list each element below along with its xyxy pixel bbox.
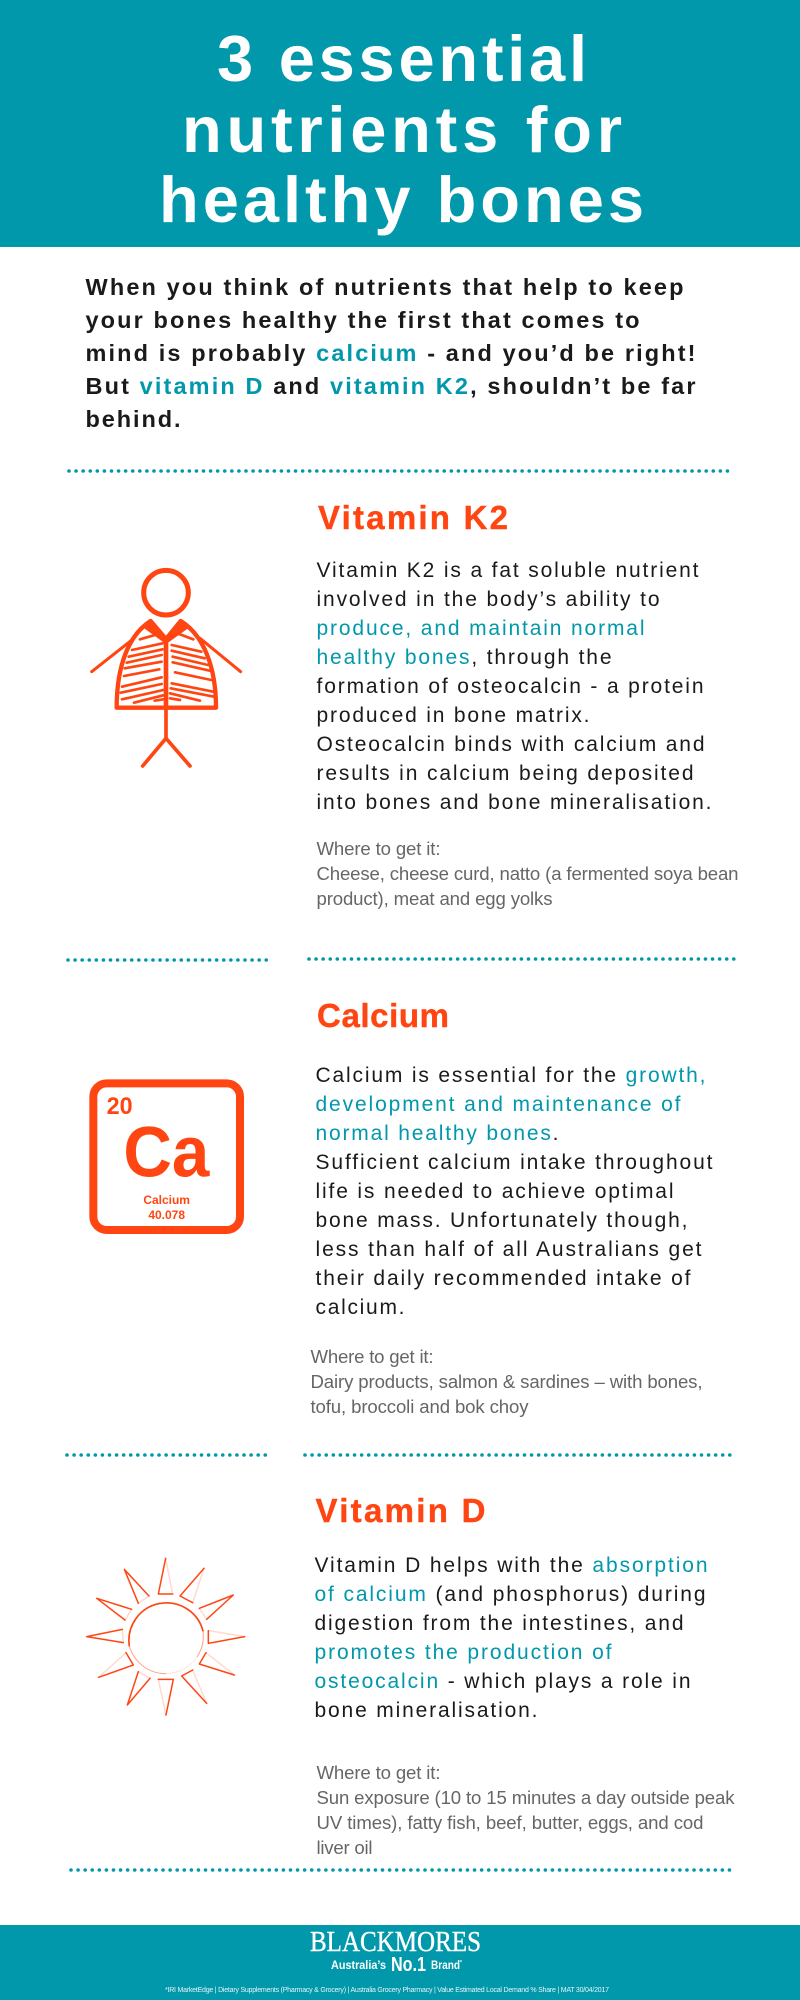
body text: less than half of all Australians get: [316, 1238, 702, 1261]
where to get it: Where to get it:: [316, 838, 440, 859]
icon: periodic table calcium tile: [93, 1083, 240, 1230]
body text: into bones and bone mineralisation.: [316, 791, 712, 814]
body text: development and maintenance of: [316, 1093, 681, 1116]
intro text: But vitamin D and vitamin K2, shouldn’t be far: [86, 373, 696, 399]
where to get it: UV times), fatty fish, beef, butter, eggs, and cod: [316, 1812, 704, 1833]
body text: bone mineralisation.: [314, 1699, 538, 1722]
title: healthy bones: [159, 163, 644, 236]
where to get it: Dairy products, salmon & sardines – with bones,: [310, 1371, 702, 1392]
title: nutrients for: [182, 93, 622, 166]
panel: vitamin K2: [92, 499, 738, 909]
panel: calcium: [93, 997, 713, 1417]
where to get it: [310, 1346, 702, 1417]
intro text: [86, 274, 696, 432]
brand tagline: Brand: [431, 1960, 460, 1972]
body text: [314, 1554, 708, 1722]
body text: promotes the production of: [314, 1641, 612, 1664]
heading: Vitamin D: [316, 1492, 486, 1529]
heading: Vitamin K2: [318, 499, 508, 536]
icon: periodic table calcium tile: 40.078: [148, 1208, 185, 1222]
body text: healthy bones, through the: [316, 646, 612, 669]
body text: life is needed to achieve optimal: [316, 1180, 674, 1203]
brand tagline: *: [460, 1960, 462, 1966]
icon: sun outline: [87, 1558, 245, 1715]
brand tagline: [331, 1954, 462, 1976]
body text: Calcium is essential for the growth,: [316, 1064, 706, 1087]
where to get it: Where to get it:: [316, 1762, 440, 1783]
body text: osteocalcin - which plays a role in: [314, 1670, 690, 1693]
brand tagline: Australia’s: [331, 1960, 386, 1972]
body text: calcium.: [316, 1296, 404, 1319]
body text: [316, 559, 712, 814]
body text: Vitamin K2 is a fat soluble nutrient: [316, 559, 699, 582]
where to get it: [316, 1762, 735, 1858]
body text: involved in the body’s ability to: [316, 588, 660, 611]
title: [159, 22, 644, 236]
body text: formation of osteocalcin - a protein: [316, 675, 704, 698]
body text: normal healthy bones.: [316, 1122, 558, 1145]
body text: Vitamin D helps with the absorption: [314, 1554, 708, 1577]
where to get it: product), meat and egg yolks: [316, 888, 552, 909]
icon: periodic table calcium tile: Ca: [123, 1112, 211, 1192]
icon: stick figure with ribcage: [92, 570, 241, 766]
intro text: When you think of nutrients that help to keep: [86, 274, 684, 300]
intro text: behind.: [86, 406, 180, 432]
title: 3 essential: [217, 22, 587, 95]
body text: Osteocalcin binds with calcium and: [316, 733, 704, 756]
body text: bone mass. Unfortunately though,: [316, 1209, 688, 1232]
icon: periodic table calcium tile: Calcium: [143, 1193, 190, 1207]
brand logo: BLACKMORES: [310, 1927, 481, 1958]
body text: Sufficient calcium intake throughout: [316, 1151, 713, 1174]
body text: produce, and maintain normal: [316, 617, 644, 640]
intro text: mind is probably calcium - and you’d be right!: [86, 340, 696, 366]
body text: results in calcium being deposited: [316, 762, 694, 785]
where to get it: Where to get it:: [310, 1346, 434, 1367]
footer banner: [0, 1925, 800, 2000]
body text: [316, 1064, 713, 1319]
body text: of calcium (and phosphorus) during: [314, 1583, 706, 1606]
icon: periodic table calcium tile: 20: [107, 1093, 133, 1120]
body text: digestion from the intestines, and: [314, 1612, 684, 1635]
where to get it: tofu, broccoli and bok choy: [310, 1396, 529, 1417]
where to get it: [316, 838, 738, 909]
brand tagline: No.1: [391, 1954, 426, 1976]
heading: Calcium: [317, 997, 449, 1034]
where to get it: liver oil: [316, 1837, 372, 1858]
footnote: *IRI MarketEdge | Dietary Supplements (Pharmacy & Grocery) | Australia Grocery Pharmacy | Value Estimated Local Demand % Share | MAT 30/04/2017: [165, 1987, 609, 1994]
body text: produced in bone matrix.: [316, 704, 590, 727]
where to get it: Cheese, cheese curd, natto (a fermented soya bean: [316, 863, 738, 884]
intro text: your bones healthy the first that comes to: [86, 307, 640, 333]
where to get it: Sun exposure (10 to 15 minutes a day outside peak: [316, 1787, 735, 1808]
header banner: [0, 0, 800, 247]
panel: vitamin D: [87, 1492, 735, 1858]
body text: their daily recommended intake of: [316, 1267, 691, 1290]
